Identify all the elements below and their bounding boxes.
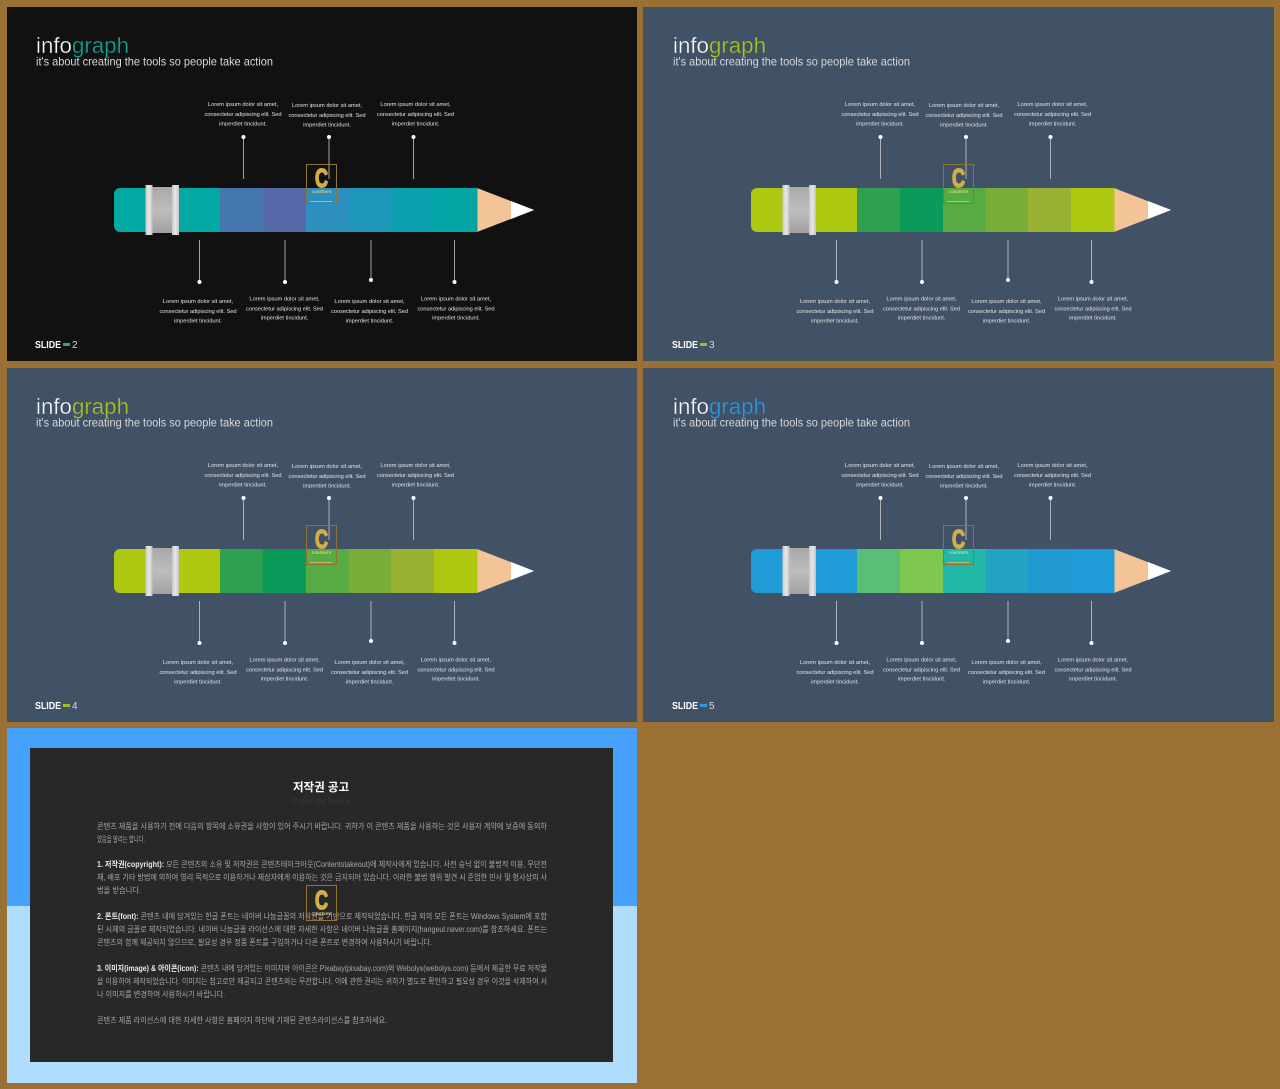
bottom text blocks: consectetur adipiscing elit. Sed bbox=[968, 670, 1045, 676]
bottom text blocks: consectetur adipiscing elit. Sed bbox=[418, 306, 494, 312]
bottom text blocks: consectetur adipiscing elit. Sed bbox=[246, 668, 323, 674]
title: infograph bbox=[36, 33, 129, 58]
bottom text blocks: Lorem ipsum dolor sit amet, bbox=[421, 296, 492, 302]
panel: slide 3 bbox=[643, 7, 1274, 361]
top text blocks: imperdiet tincidunt. bbox=[219, 482, 267, 488]
bottom text blocks: consectetur adipiscing elit. Sed bbox=[418, 668, 494, 674]
top text blocks: imperdiet tincidunt. bbox=[856, 482, 904, 488]
bottom text blocks: Lorem ipsum dolor sit amet, bbox=[1058, 658, 1129, 664]
top text blocks: consectetur adipiscing elit. Sed bbox=[288, 113, 366, 119]
top text blocks: Lorem ipsum dolor sit amet, bbox=[208, 102, 279, 108]
top text blocks: consectetur adipiscing elit. Sed bbox=[204, 112, 282, 118]
top text blocks bbox=[842, 102, 1091, 128]
bottom text blocks bbox=[160, 296, 494, 324]
bottom text blocks: Lorem ipsum dolor sit amet, bbox=[421, 658, 492, 664]
notice text: 2. 폰트(font): 콘텐츠 내에 담겨있는 한글 폰트는 네이버 나눔글꼴의 저작권을 기반으로 제작되었습니다. 한글 외의 모든 폰트는 Windows System에 포함 bbox=[97, 911, 548, 921]
bottom text blocks: Lorem ipsum dolor sit amet, bbox=[163, 660, 234, 666]
bottom text blocks: consectetur adipiscing elit. Sed bbox=[160, 670, 236, 676]
notice text: 나 이미지를 변경하여 사용하시기 바랍니다. bbox=[97, 989, 225, 999]
top text blocks: Lorem ipsum dolor sit amet, bbox=[845, 102, 916, 108]
bottom text blocks: Lorem ipsum dolor sit amet, bbox=[334, 299, 405, 305]
logo watermark: CONTENTS bbox=[312, 551, 332, 555]
top text blocks bbox=[842, 463, 1091, 490]
logo watermark: CONTENTS bbox=[312, 912, 332, 916]
bottom text blocks: Lorem ipsum dolor sit amet, bbox=[163, 299, 234, 305]
connector lines and dots bbox=[834, 496, 1094, 645]
notice text: 콘텐츠 제품을 사용하기 전에 다음의 항목에 소유권을 사항이 있어 주시기 바랍니다. 귀하가 이 콘텐츠 제품을 사용하는 것은 사용자 계약에 보증에 동의하 bbox=[97, 821, 548, 831]
top text blocks bbox=[204, 102, 454, 128]
pencil bbox=[751, 185, 1171, 235]
logo watermark bbox=[306, 885, 336, 920]
subtitle: it's about creating the tools so people take action bbox=[36, 416, 273, 430]
bottom text blocks: imperdiet tincidunt. bbox=[432, 316, 480, 322]
top text blocks: consectetur adipiscing elit. Sed bbox=[204, 473, 282, 479]
panel: slide 4 bbox=[7, 368, 637, 722]
bottom text blocks: consectetur adipiscing elit. Sed bbox=[331, 670, 408, 676]
number: 4 bbox=[72, 701, 78, 712]
notice text: 재, 배포 기타 방법에 의하여 영리 목적으로 이용하거나 제삼자에게 이용하는 것은 금지되어 있습니다. 이러한 불법 행위 발견 시 준엄한 민사 및 형사상의 사 bbox=[97, 872, 548, 882]
heading: 저작권 공고 bbox=[293, 780, 349, 794]
pencil bbox=[751, 546, 1171, 596]
bottom text blocks: consectetur adipiscing elit. Sed bbox=[1054, 668, 1132, 674]
logo watermark: C bbox=[952, 524, 965, 554]
bottom text blocks: consectetur adipiscing elit. Sed bbox=[968, 309, 1045, 315]
bottom text blocks: imperdiet tincidunt. bbox=[346, 680, 394, 686]
title: infograph bbox=[673, 394, 766, 419]
top text blocks: consectetur adipiscing elit. Sed bbox=[1014, 112, 1091, 118]
top text blocks: imperdiet tincidunt. bbox=[392, 482, 440, 488]
top text blocks: imperdiet tincidunt. bbox=[1029, 482, 1077, 488]
notice text: 을 이용하여 제작되었습니다. 이미지는 참고로만 제공되고 콘텐츠와는 무관합니다. 이에 관한 권리는 귀하가 별도로 확인하고 필요성 경우 이것을 삭제하여 서 bbox=[97, 976, 547, 986]
top text blocks: imperdiet tincidunt. bbox=[392, 122, 440, 128]
bottom text blocks: consectetur adipiscing elit. Sed bbox=[796, 670, 874, 676]
bottom text blocks: imperdiet tincidunt. bbox=[1069, 676, 1117, 682]
bottom text blocks: consectetur adipiscing elit. Sed bbox=[796, 309, 874, 315]
panel: copyright notice bbox=[7, 728, 637, 1083]
notice text bbox=[97, 821, 548, 1025]
slide dash bbox=[63, 343, 70, 346]
notice text: 된 시체의 글꼴로 제작되었습니다. 네이버 나눔글꼴 라이선스에 대한 자세한 사항은 네이버 나눔글꼴 홈페이지(hangeul.naver.com)를 참조하세요. 폰트는 bbox=[97, 924, 547, 934]
bottom text blocks: imperdiet tincidunt. bbox=[432, 676, 480, 682]
top text blocks: Lorem ipsum dolor sit amet, bbox=[380, 463, 451, 469]
slide number: SLIDE bbox=[672, 340, 698, 351]
bottom text blocks: imperdiet tincidunt. bbox=[983, 680, 1031, 686]
top text blocks: consectetur adipiscing elit. Sed bbox=[926, 474, 1002, 480]
bottom text blocks: imperdiet tincidunt. bbox=[261, 676, 309, 682]
title: infograph bbox=[673, 33, 766, 58]
bottom text blocks: imperdiet tincidunt. bbox=[1069, 316, 1117, 322]
bottom text blocks: imperdiet tincidunt. bbox=[174, 680, 222, 686]
bottom text blocks: Lorem ipsum dolor sit amet, bbox=[1058, 296, 1129, 302]
connector lines and dots bbox=[198, 135, 456, 284]
top text blocks: Lorem ipsum dolor sit amet, bbox=[380, 102, 451, 108]
notice text: 콘텐츠 제품 라이선스에 대한 자세한 사항은 홈페이지 하단에 기재된 콘텐츠라이선스를 참조하세요. bbox=[97, 1015, 387, 1025]
number: 3 bbox=[709, 340, 715, 351]
pencil bbox=[114, 546, 534, 596]
top text blocks: consectetur adipiscing elit. Sed bbox=[377, 473, 454, 479]
notice text: 3. 이미지(image) & 아이콘(icon): 콘텐츠 내에 담겨있는 이미지와 아이콘은 Pixabay(pixabay.com)와 Webolys(webolys.com) 등에서 제공한 무료 저작물 bbox=[97, 963, 547, 973]
top text blocks: Lorem ipsum dolor sit amet, bbox=[845, 463, 916, 469]
top text blocks: consectetur adipiscing elit. Sed bbox=[288, 474, 366, 480]
subheading: Copyright Notice bbox=[291, 797, 351, 806]
panel: slide 2 bbox=[7, 7, 637, 361]
top text blocks: imperdiet tincidunt. bbox=[940, 484, 988, 490]
logo watermark: CONTENTS bbox=[949, 190, 969, 194]
bottom text blocks: imperdiet tincidunt. bbox=[811, 680, 859, 686]
top text blocks: imperdiet tincidunt. bbox=[219, 122, 267, 128]
bottom text blocks: imperdiet tincidunt. bbox=[174, 318, 222, 324]
title: infograph bbox=[36, 394, 129, 419]
top text blocks: imperdiet tincidunt. bbox=[303, 122, 351, 128]
slide dash bbox=[700, 704, 707, 707]
bottom text blocks: Lorem ipsum dolor sit amet, bbox=[249, 658, 320, 664]
notice text: 콘텐츠의 함께 제공되지 않으므로, 필요성 경우 정품 폰트를 구입하거나 다른 폰트로 변경하여 사용하시기 바랍니다. bbox=[97, 937, 432, 947]
subtitle: it's about creating the tools so people take action bbox=[673, 416, 910, 430]
bottom text blocks bbox=[796, 296, 1132, 324]
top text blocks: imperdiet tincidunt. bbox=[856, 122, 904, 128]
top text blocks: Lorem ipsum dolor sit amet, bbox=[292, 464, 363, 470]
slide dash bbox=[700, 343, 707, 346]
top text blocks: imperdiet tincidunt. bbox=[303, 484, 351, 490]
subtitle: it's about creating the tools so people take action bbox=[673, 54, 910, 68]
bottom text blocks: consectetur adipiscing elit. Sed bbox=[883, 668, 960, 674]
top text blocks: imperdiet tincidunt. bbox=[1029, 122, 1077, 128]
slide number: SLIDE bbox=[672, 701, 698, 712]
bottom text blocks: imperdiet tincidunt. bbox=[346, 318, 394, 324]
slide number: SLIDE bbox=[35, 701, 61, 712]
logo watermark: C bbox=[315, 885, 328, 915]
top text blocks: consectetur adipiscing elit. Sed bbox=[1014, 473, 1091, 479]
connector lines and dots bbox=[834, 135, 1094, 284]
top text blocks: Lorem ipsum dolor sit amet, bbox=[929, 103, 1000, 109]
logo watermark: C bbox=[315, 524, 328, 554]
logo watermark: C bbox=[315, 163, 328, 193]
bottom text blocks bbox=[796, 658, 1132, 686]
logo watermark bbox=[306, 163, 336, 204]
bottom text blocks: imperdiet tincidunt. bbox=[261, 316, 309, 322]
top text blocks: consectetur adipiscing elit. Sed bbox=[377, 112, 454, 118]
logo watermark bbox=[306, 524, 336, 564]
logo watermark: CONTENTS bbox=[312, 190, 332, 194]
bottom text blocks: Lorem ipsum dolor sit amet, bbox=[971, 660, 1042, 666]
slide number: SLIDE bbox=[35, 340, 61, 351]
bottom text blocks: imperdiet tincidunt. bbox=[811, 318, 859, 324]
logo watermark: CONTENTS bbox=[949, 551, 969, 555]
bottom text blocks: consectetur adipiscing elit. Sed bbox=[160, 309, 236, 315]
bottom text blocks: Lorem ipsum dolor sit amet, bbox=[249, 296, 320, 302]
connector lines and dots bbox=[198, 496, 456, 645]
top text blocks: consectetur adipiscing elit. Sed bbox=[842, 112, 918, 118]
number: 5 bbox=[709, 701, 715, 712]
bottom text blocks: imperdiet tincidunt. bbox=[898, 676, 946, 682]
bottom text blocks: Lorem ipsum dolor sit amet, bbox=[334, 660, 405, 666]
bottom text blocks: imperdiet tincidunt. bbox=[898, 316, 946, 322]
top text blocks bbox=[204, 463, 454, 490]
notice text: 였음을 알리는 합니다. bbox=[97, 834, 145, 844]
notice text: 법을 받습니다. bbox=[97, 885, 141, 895]
bottom text blocks: consectetur adipiscing elit. Sed bbox=[331, 309, 408, 315]
bottom text blocks: consectetur adipiscing elit. Sed bbox=[246, 306, 323, 312]
subtitle: it's about creating the tools so people take action bbox=[36, 54, 273, 68]
bottom text blocks: Lorem ipsum dolor sit amet, bbox=[800, 660, 871, 666]
bottom text blocks: Lorem ipsum dolor sit amet, bbox=[886, 658, 957, 664]
top text blocks: Lorem ipsum dolor sit amet, bbox=[292, 103, 363, 109]
slide dash bbox=[63, 704, 70, 707]
pencil bbox=[114, 185, 534, 235]
bottom text blocks: consectetur adipiscing elit. Sed bbox=[1054, 306, 1132, 312]
top text blocks: Lorem ipsum dolor sit amet, bbox=[208, 463, 279, 469]
notice text: 1. 저작권(copyright): 모든 콘텐츠의 소유 및 저작권은 콘텐츠테이크아웃(Contentstakeout)에 제작사에게 있습니다. 사전 승낙 없이 불법적 이용, 무단전 bbox=[97, 859, 547, 869]
panel: slide 5 bbox=[643, 368, 1274, 722]
number: 2 bbox=[72, 340, 78, 351]
bottom text blocks: imperdiet tincidunt. bbox=[983, 318, 1031, 324]
top text blocks: Lorem ipsum dolor sit amet, bbox=[1017, 102, 1088, 108]
logo watermark: C bbox=[952, 163, 965, 193]
bottom text blocks: consectetur adipiscing elit. Sed bbox=[883, 306, 960, 312]
logo watermark bbox=[944, 524, 974, 564]
top text blocks: imperdiet tincidunt. bbox=[940, 122, 988, 128]
bottom text blocks bbox=[160, 658, 494, 686]
top text blocks: Lorem ipsum dolor sit amet, bbox=[929, 464, 1000, 470]
top text blocks: Lorem ipsum dolor sit amet, bbox=[1017, 463, 1088, 469]
top text blocks: consectetur adipiscing elit. Sed bbox=[842, 473, 918, 479]
bottom text blocks: Lorem ipsum dolor sit amet, bbox=[886, 296, 957, 302]
logo watermark bbox=[944, 163, 974, 204]
top text blocks: consectetur adipiscing elit. Sed bbox=[926, 113, 1002, 119]
bottom text blocks: Lorem ipsum dolor sit amet, bbox=[971, 299, 1042, 305]
bottom text blocks: Lorem ipsum dolor sit amet, bbox=[800, 299, 871, 305]
